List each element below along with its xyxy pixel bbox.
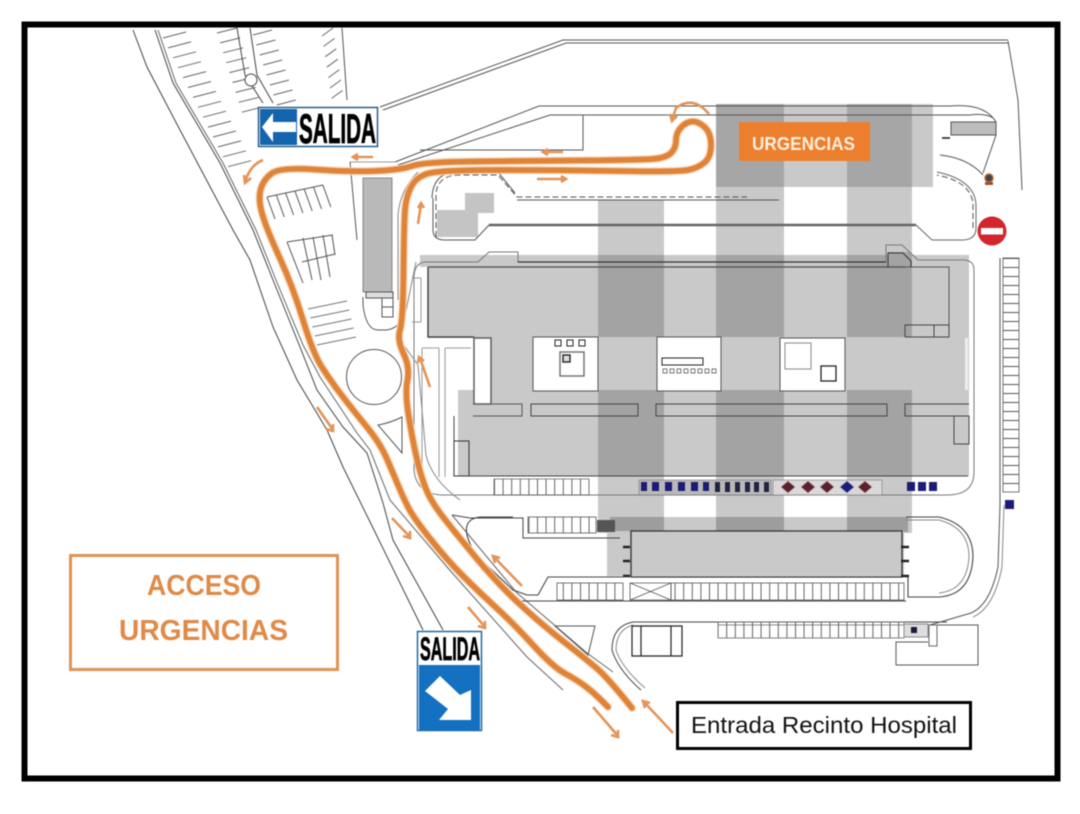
salida sign west: SALIDA bbox=[299, 105, 376, 152]
salida sign south: SALIDA bbox=[420, 631, 480, 667]
salida sign south bbox=[418, 631, 482, 730]
hospital building outlines bbox=[412, 245, 974, 495]
icon: no entry sign bbox=[978, 216, 1006, 246]
east road and parking bbox=[930, 258, 1019, 625]
top road lines bbox=[350, 40, 1022, 300]
direction arrows bbox=[244, 103, 709, 737]
outer road boundaries bbox=[133, 30, 613, 690]
urgencias label: URGENCIAS bbox=[752, 134, 855, 154]
callout: acceso urgencias: ACCESO bbox=[147, 570, 261, 602]
salida sign west bbox=[258, 105, 378, 152]
urgencias label bbox=[739, 122, 870, 161]
urgent care route bbox=[260, 121, 711, 708]
diamond markers bbox=[773, 480, 882, 495]
callout: entrada recinto hospital: Entrada Recinto Hospital bbox=[691, 712, 957, 738]
parking row below hospital bbox=[494, 479, 589, 495]
callout: entrada recinto hospital bbox=[678, 702, 970, 748]
hospital courtyards bbox=[474, 337, 845, 404]
south entrance building bbox=[612, 622, 978, 690]
south parking rows bbox=[528, 517, 904, 600]
south parking loop bbox=[452, 515, 973, 601]
callout: acceso urgencias: URGENCIAS bbox=[119, 615, 288, 647]
upper drive and island bbox=[432, 172, 976, 240]
gray building zones bbox=[363, 104, 969, 576]
callout: acceso urgencias bbox=[70, 556, 338, 670]
west car parks bbox=[267, 185, 356, 345]
small building and marker top right bbox=[951, 122, 996, 185]
roundabout and central islands bbox=[346, 292, 595, 655]
blue accessible parking spots bbox=[639, 480, 1014, 509]
top-left car park bbox=[163, 28, 347, 167]
